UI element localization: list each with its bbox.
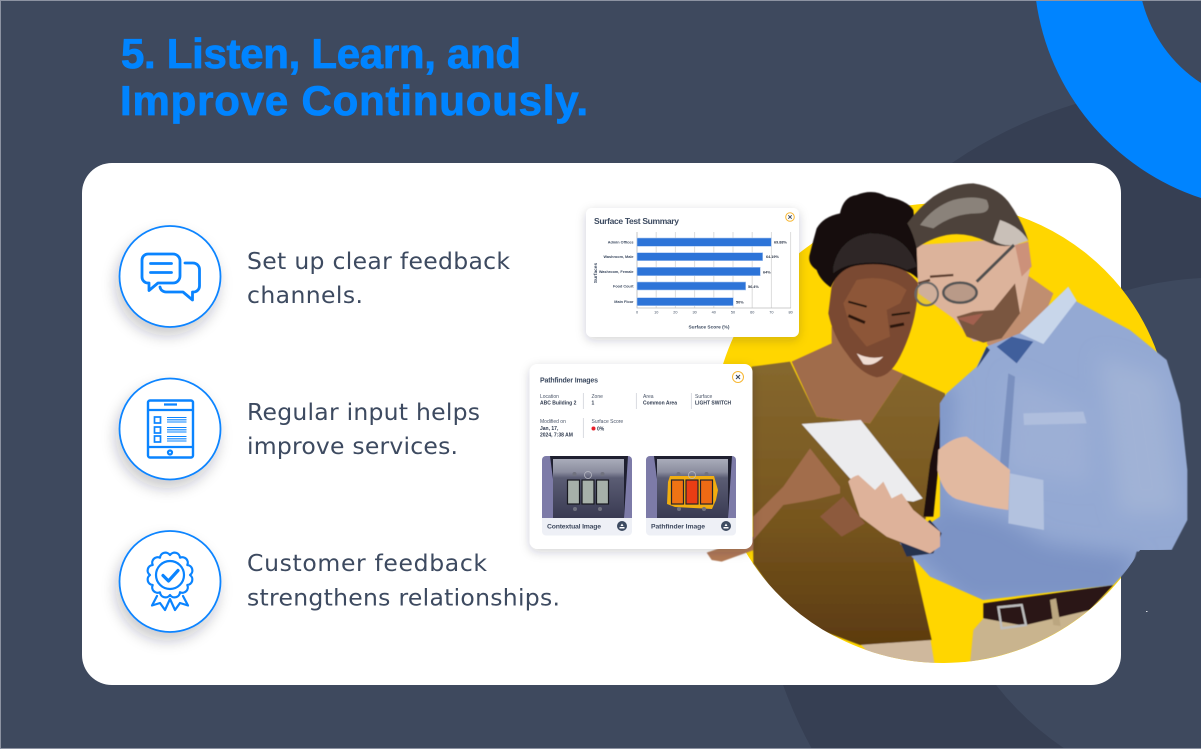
text: feedback channels: Set up clear feedback	[247, 247, 510, 275]
title: Improve Continuously.	[120, 77, 588, 124]
bar chart: 70	[769, 310, 774, 314]
speck	[1146, 611, 1148, 612]
icon: chat bubbles	[142, 254, 200, 300]
metadata: Jan, 17,	[540, 426, 559, 432]
bar chart: Main Floor	[614, 300, 634, 304]
top edge	[0, 0, 1201, 1]
main white card	[82, 163, 1121, 685]
photo: two people looking at a tablet	[707, 183, 1187, 667]
text: customer feedback	[247, 549, 560, 612]
title: 5. Listen, Learn, and	[121, 30, 521, 77]
metadata: LIGHT SWITCH	[695, 400, 731, 406]
panel: surface test summary	[586, 208, 799, 337]
metadata: Modified on	[540, 419, 566, 425]
image card: pathfinder	[646, 456, 736, 536]
chart title: Surface Test Summary	[594, 216, 679, 226]
bar chart: Surfaces	[593, 263, 599, 283]
bar chart: 50%	[736, 300, 744, 304]
metadata: 0%	[597, 426, 605, 432]
metadata: ABC Building 2	[540, 400, 577, 406]
bar chart: 56.4%	[748, 285, 759, 289]
bar chart: 80	[788, 310, 793, 314]
icon circle 2	[120, 378, 220, 480]
bar chart	[593, 232, 793, 330]
metadata: 1	[592, 400, 594, 406]
text: customer feedback: strengthens relationships.	[247, 584, 560, 612]
yellow circle	[712, 203, 1121, 663]
close icon	[732, 372, 744, 382]
tablet	[802, 420, 923, 502]
bottom edge	[0, 748, 1201, 749]
bar chart: 64%	[763, 270, 771, 274]
bar chart: 0	[636, 310, 638, 314]
icon: tablet checklist	[148, 400, 193, 458]
image card: contextual	[542, 456, 632, 536]
man	[900, 183, 1187, 663]
bar chart: Washroom, Male	[603, 255, 634, 259]
yellow circle edge over background	[1121, 288, 1158, 355]
bar chart: Admin Offices	[608, 240, 634, 244]
text: feedback channels: channels.	[247, 281, 363, 309]
bar chart: 60	[750, 310, 754, 314]
title	[120, 30, 588, 124]
text: regular input	[247, 398, 480, 460]
bar chart: 50	[731, 310, 735, 314]
icon: award badge	[148, 553, 192, 610]
close icon	[786, 213, 794, 221]
bar chart: 69.88%	[774, 240, 788, 244]
metadata: Location	[540, 394, 559, 400]
hand holding tablet	[848, 475, 940, 553]
bar chart: 40	[712, 310, 716, 314]
bar chart: 10	[654, 310, 658, 314]
text: customer feedback: Customer feedback	[247, 549, 487, 577]
bar chart: Washroom, Female	[599, 270, 634, 274]
bar chart: 64.19%	[766, 255, 780, 259]
bar chart: 20	[673, 310, 678, 314]
bar chart: 30	[692, 310, 697, 314]
woman	[707, 192, 945, 667]
metadata: Zone	[592, 394, 603, 400]
text: regular input: improve services.	[247, 432, 458, 460]
background ring	[756, 85, 1201, 749]
bar chart: Food Court	[613, 284, 634, 288]
text: regular input: Regular input helps	[247, 398, 480, 426]
metadata: 2024, 7:38 AM	[540, 433, 573, 439]
image card: contextual: Contextual Image	[547, 524, 601, 530]
panel title: Pathfinder Images	[540, 378, 598, 384]
metadata: Surface	[695, 394, 712, 400]
metadata	[540, 393, 731, 439]
icon circle 3	[120, 531, 220, 632]
blue arc	[1036, 0, 1201, 198]
bar chart: Surface Score (%)	[688, 324, 730, 330]
metadata: Surface Score	[592, 419, 623, 425]
metadata: Area	[643, 394, 654, 400]
left edge	[0, 0, 1, 749]
icon circle 1	[120, 226, 220, 327]
image card: pathfinder: Pathfinder Image	[651, 524, 705, 530]
metadata: Common Area	[643, 400, 677, 406]
text: feedback channels	[247, 247, 510, 309]
panel: pathfinder images	[530, 364, 752, 549]
